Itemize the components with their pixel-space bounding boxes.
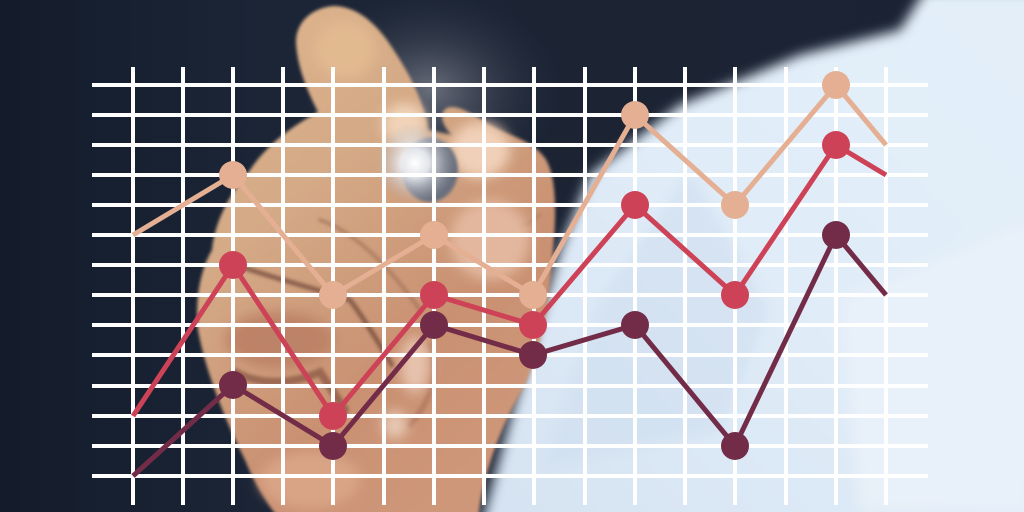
- background: blurred blue shirt: [480, 0, 1024, 512]
- fingertip highlights: [225, 22, 530, 508]
- hand silhouette: [197, 6, 555, 512]
- chart: red line: [133, 131, 886, 430]
- finger shadow creases: [235, 215, 540, 425]
- photo: hand pointing: [197, 6, 555, 512]
- chart: maroon line: [133, 221, 886, 476]
- chart: grid: [92, 67, 928, 505]
- icon: glowing touch point: [375, 123, 458, 203]
- chart: peach line: [133, 71, 886, 309]
- background: glow behind fingers: [300, 0, 560, 190]
